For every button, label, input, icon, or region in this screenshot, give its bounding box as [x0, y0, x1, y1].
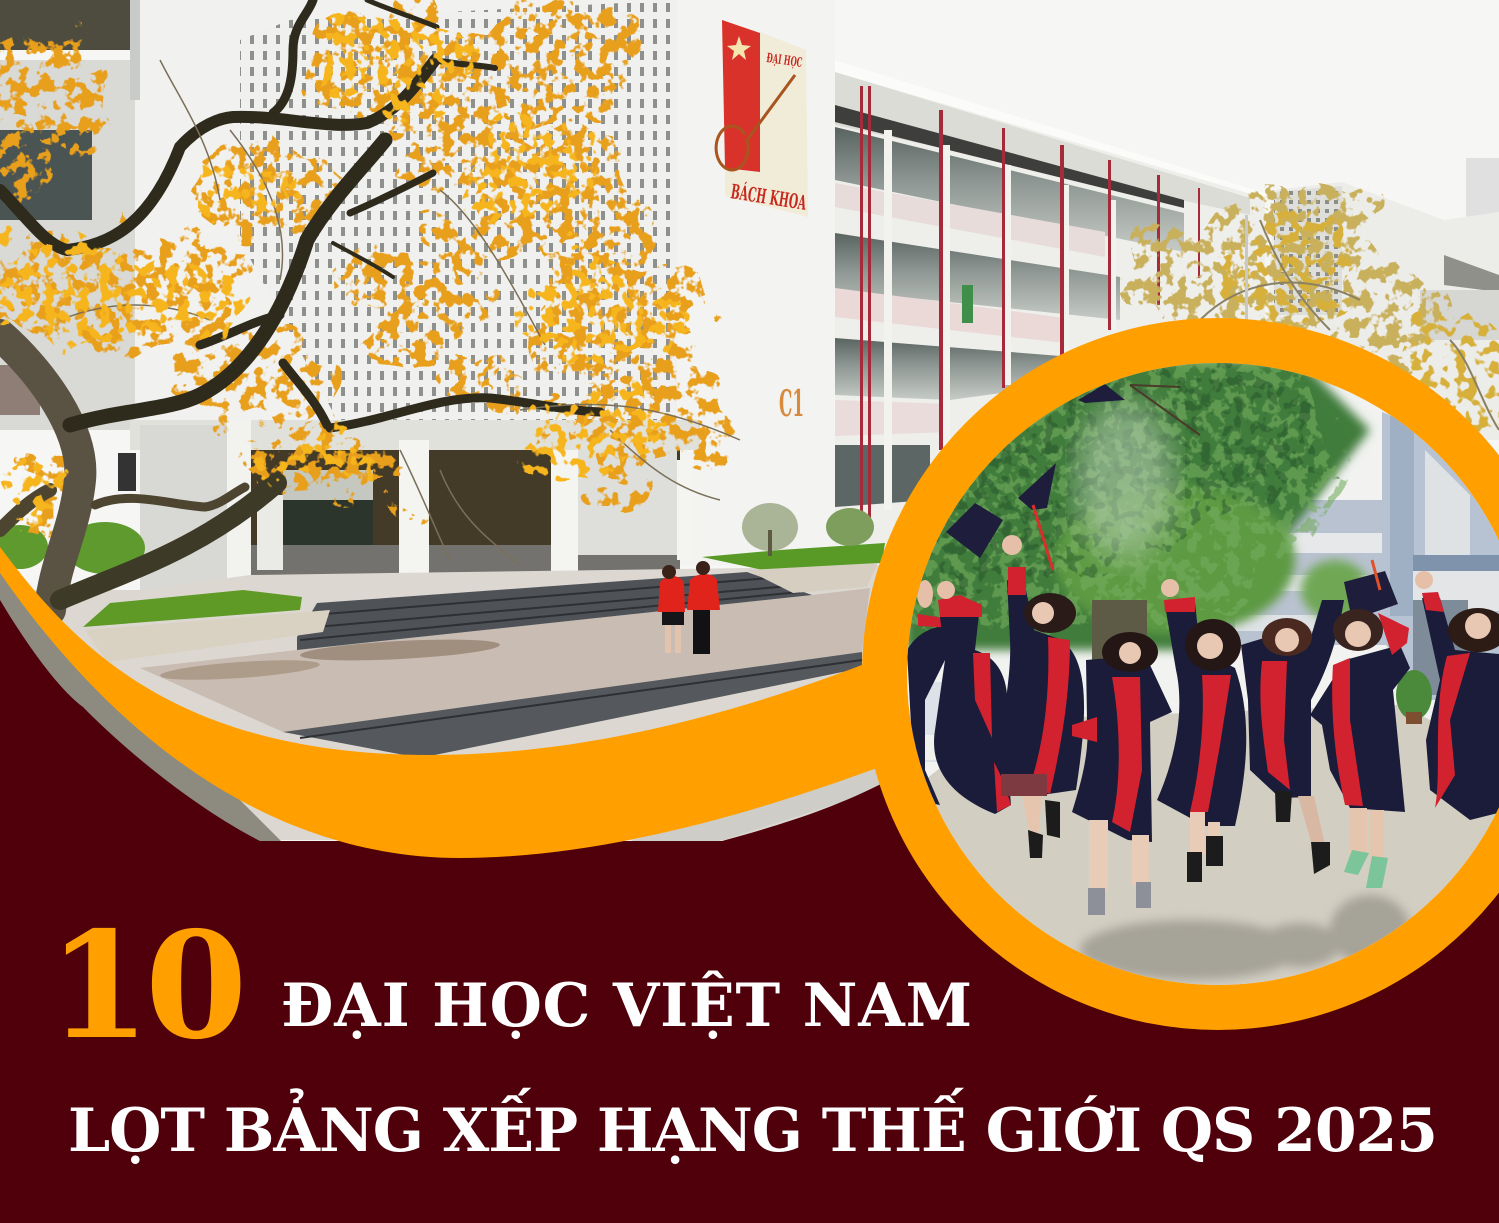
foliage under layer — [0, 0, 735, 530]
main building facade with perforated blocks — [0, 0, 685, 440]
maroon background shape — [0, 600, 1499, 1223]
tree foliage and branches — [0, 0, 740, 610]
graduate 6 — [1241, 600, 1344, 874]
number 10: 10 — [48, 899, 247, 1072]
graduates photo in circle — [900, 360, 1499, 1000]
green tree — [905, 360, 1370, 660]
students walking — [658, 561, 720, 654]
colonnade — [118, 420, 700, 592]
twigs — [60, 60, 740, 565]
campus photo — [0, 0, 1499, 860]
sign: Bách Khoa: BÁCH KHOA — [729, 179, 808, 215]
foliage top layer — [0, 15, 680, 518]
ground — [900, 670, 1499, 1000]
sign: Bách Khoa — [716, 20, 808, 217]
person on balcony — [962, 285, 973, 323]
right wing with floors — [835, 60, 1265, 545]
flying caps — [946, 384, 1398, 620]
graduate 8 — [1415, 571, 1499, 820]
graduate 5 — [1157, 597, 1246, 882]
sign: Bách Khoa: ĐẠI HỌC — [765, 51, 803, 71]
plaza and steps — [0, 565, 880, 850]
sky — [0, 0, 1499, 850]
right tree, olive-yellow foliage — [1120, 200, 1499, 445]
branches — [0, 0, 600, 610]
headline line 1: ĐẠI HỌC VIỆT NAM — [281, 970, 972, 1041]
headline line 2: LỌT BẢNG XẾP HẠNG THẾ GIỚI QS 2025 — [68, 1087, 1438, 1166]
orange ring — [862, 318, 1499, 1030]
ground sliver under swoosh — [0, 560, 300, 860]
graduate 2 — [934, 581, 1011, 814]
hedges — [0, 503, 885, 662]
tower with sign — [677, 0, 835, 565]
graduate 4 — [1072, 579, 1179, 915]
tower with sign: C1 — [779, 383, 804, 425]
sky and buildings — [900, 360, 1499, 1000]
graduate 1 — [908, 580, 945, 805]
orange swoosh — [0, 547, 885, 858]
graduate 3 — [1000, 535, 1084, 858]
distant right buildings — [1262, 158, 1499, 440]
graduate 7 — [1310, 609, 1410, 888]
